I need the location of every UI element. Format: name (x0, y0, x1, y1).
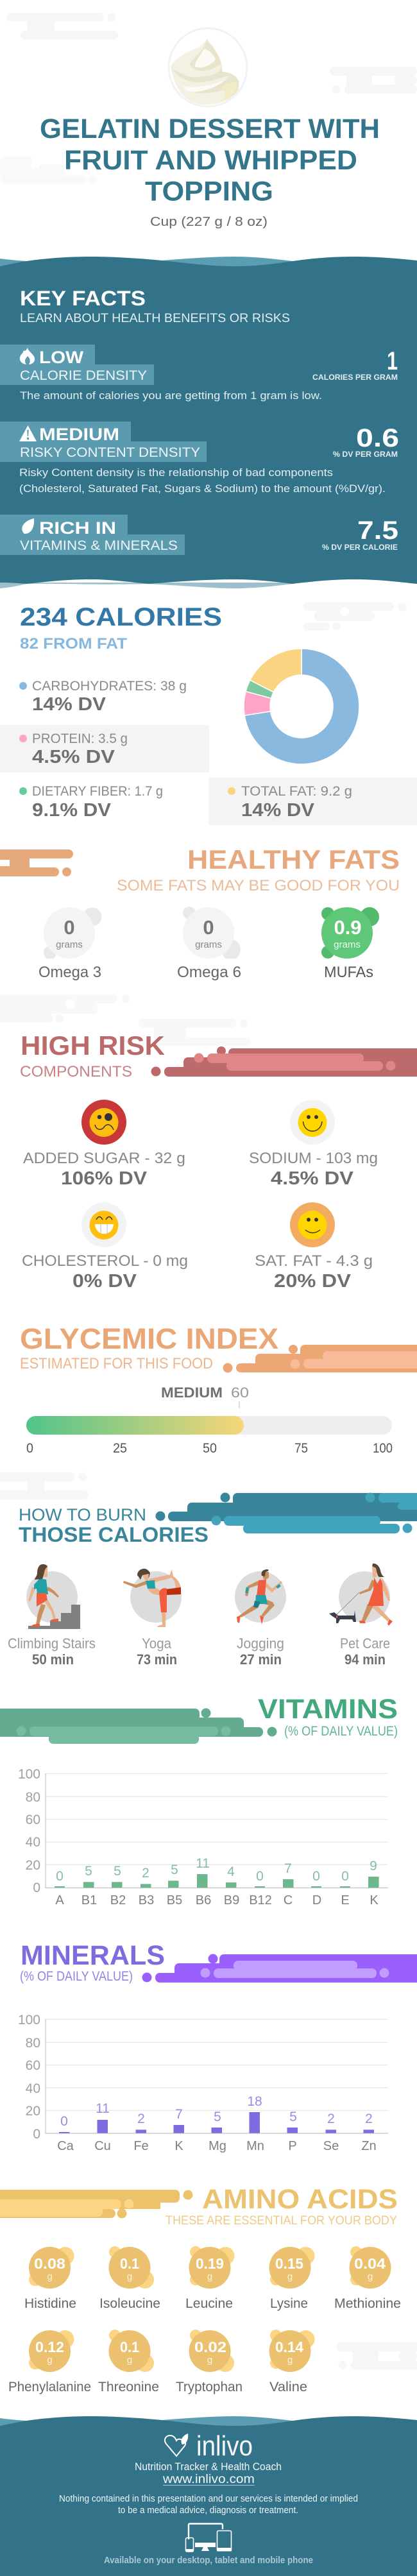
amino acid: phenylalanine: 0.12 (35, 2339, 64, 2355)
bar chart: vitamins: A (55, 1893, 64, 1907)
bar chart: minerals: 5 (214, 2110, 221, 2124)
serving size: Cup (227 g / 8 oz) (150, 215, 268, 229)
stat: MUFAs: MUFAs (324, 964, 373, 981)
bar chart: vitamins: 7 (284, 1861, 292, 1876)
bar chart: vitamins: B5 (167, 1893, 182, 1907)
amino acid: threonine: 0.1 (120, 2339, 139, 2355)
glycemic index gauge: 0 (26, 1441, 33, 1456)
fact: medium risky content density: % DV PER GRAM (333, 451, 398, 459)
glycemic index gauge: 50 (203, 1441, 217, 1456)
glycemic index heading: ESTIMATED FOR THIS FOOD (20, 1355, 213, 1372)
fact: medium risky content density: RISKY CONTENT DENSITY (20, 445, 200, 460)
bar chart: vitamins: 5 (171, 1863, 178, 1877)
amino acid: threonine (98, 2330, 159, 2394)
bar chart: minerals: K (174, 2139, 183, 2153)
bar chart: minerals: 100 (18, 2013, 40, 2027)
bar chart: minerals: Zn (361, 2139, 377, 2153)
bar chart: vitamins: 60 (26, 1813, 40, 1827)
high risk ribbon (151, 1046, 417, 1077)
legend: carbohydrates: 14% DV (32, 694, 106, 715)
high risk heading: HIGH RISK (21, 1030, 165, 1061)
website link: www.inlivo.com (162, 2473, 255, 2486)
vitamins ribbon (0, 1708, 277, 1744)
bar chart: minerals: Cu (94, 2139, 111, 2153)
bar chart: vitamins: 0 (312, 1869, 320, 1884)
bar chart: vitamins: 2 (142, 1866, 149, 1881)
fact: rich in vitamins and minerals: RICH IN (39, 518, 116, 538)
bar chart: vitamins: B9 (224, 1893, 239, 1907)
bar chart: vitamins: 4 (227, 1864, 235, 1879)
glycemic index ribbon (223, 1345, 417, 1373)
background cloud: amino acids (336, 2342, 417, 2369)
title: GELATIN DESSERT WITH (40, 114, 380, 144)
key facts heading (20, 287, 290, 325)
amino acid: valine (269, 2330, 314, 2394)
background clouds: high risk (0, 994, 250, 1046)
vitamins heading: (% OF DAILY VALUE) (284, 1724, 398, 1739)
legend: dietary fiber: 9.1% DV (32, 800, 112, 821)
bar chart: minerals: 0 (60, 2114, 68, 2129)
bar chart: vitamins: B1 (81, 1893, 97, 1907)
healthy fats heading: SOME FATS MAY BE GOOD FOR YOU (117, 877, 400, 894)
healthy fats heading (117, 844, 400, 894)
panel: key facts (0, 257, 417, 588)
burn calories heading (19, 1505, 208, 1546)
fact: low calorie density: 1 (387, 347, 398, 375)
stat: omega 6: Omega 6 (177, 964, 241, 981)
bar chart: vitamins: 5 (114, 1864, 121, 1879)
disclaimer: to be a medical advice, diagnosis or treatment. (118, 2505, 298, 2516)
bar chart: vitamins: K (370, 1893, 379, 1907)
activity: pet care (329, 1564, 393, 1668)
bar chart: vitamins: D (312, 1893, 321, 1907)
bar chart: vitamins: C (284, 1893, 293, 1907)
panel: footer (0, 2416, 417, 2576)
activity: pet care: Pet Care (340, 1635, 390, 1651)
bar chart: minerals: 18 (247, 2094, 262, 2109)
stat: omega 6 (177, 907, 241, 981)
legend: total fat: 14% DV (241, 800, 315, 821)
component: sodium: 4.5% DV (271, 1168, 354, 1189)
fact: low calorie density: LOW (39, 348, 84, 367)
component: added sugar: 106% DV (61, 1168, 148, 1189)
amino acid: leucine: 0.19 (196, 2255, 224, 2272)
vitamins heading: VITAMINS (258, 1694, 398, 1725)
activity: yoga: 73 min (137, 1651, 177, 1668)
legend: protein: 4.5% DV (32, 747, 115, 767)
amino acid: methionine: Methionine (334, 2296, 401, 2311)
bar chart: vitamins: 20 (26, 1858, 40, 1873)
amino acid: histidine (24, 2247, 76, 2311)
bar chart: vitamins: 40 (26, 1835, 40, 1850)
activity: yoga (123, 1569, 182, 1668)
amino acid: methionine: 0.04 (354, 2255, 386, 2272)
fact: rich in vitamins and minerals (0, 515, 398, 555)
component: added sugar (23, 1100, 185, 1189)
bar chart: minerals: Mg (208, 2139, 226, 2153)
logo: inlivo (165, 2430, 253, 2462)
background cloud: calories (303, 602, 407, 631)
amino acid: leucine: Leucine (185, 2296, 233, 2311)
activity: jogging: Jogging (237, 1635, 284, 1651)
title: TOPPING (145, 176, 273, 207)
amino acid: isoleucine: Isoleucine (99, 2296, 160, 2311)
fact: medium risky content density: 0.6 (356, 424, 399, 452)
calories heading: 234 CALORIES (20, 603, 222, 631)
macro rows background (0, 725, 417, 825)
bar chart: vitamins: 5 (85, 1864, 92, 1879)
bar chart: vitamins: B12 (249, 1893, 272, 1907)
component: sodium: SODIUM - 103 mg (249, 1150, 378, 1167)
legend: dietary fiber (19, 784, 163, 821)
high risk heading: COMPONENTS (20, 1063, 132, 1080)
bar chart: vitamins: B6 (196, 1893, 211, 1907)
amino acid: tryptophan (176, 2330, 243, 2394)
amino acid: threonine: Threonine (98, 2380, 159, 2394)
bar chart: minerals (18, 2013, 388, 2153)
amino acid: tryptophan: Tryptophan (176, 2380, 243, 2394)
minerals heading: MINERALS (21, 1940, 165, 1971)
component: cholesterol: CHOLESTEROL - 0 mg (22, 1252, 188, 1270)
component: sodium (249, 1100, 378, 1189)
amino acid: tryptophan: 0.02 (194, 2339, 226, 2355)
glycemic index gauge (26, 1385, 393, 1456)
bar chart: vitamins: 0 (56, 1869, 64, 1884)
fact: medium risky content density: Risky Content density is the relationship of bad components (19, 467, 333, 479)
fact: medium risky content density: (Cholesterol, Saturated Fat, Sugars & Sodium) to the amount (%DV/gr). (19, 483, 386, 495)
amino acid: methionine (334, 2246, 401, 2311)
bar chart: minerals: 5 (289, 2110, 297, 2124)
stat: omega 3: Omega 3 (38, 964, 101, 981)
bar chart: minerals: 60 (26, 2058, 40, 2073)
fact: low calorie density: CALORIES PER GRAM (312, 374, 398, 382)
amino acid: valine: 0.14 (275, 2339, 303, 2355)
stat: MUFAs: grams (334, 939, 361, 950)
bar chart: vitamins: B2 (110, 1893, 126, 1907)
fact: low calorie density (0, 345, 398, 402)
bar chart: minerals: 2 (365, 2111, 373, 2126)
amino acid: phenylalanine (8, 2330, 91, 2394)
glycemic index gauge: 75 (294, 1441, 308, 1456)
amino acid: leucine (185, 2246, 235, 2311)
stat: omega 6: grams (195, 939, 222, 950)
legend: protein (19, 731, 128, 767)
bar chart: minerals: 2 (327, 2111, 335, 2126)
amino acid: phenylalanine: g (47, 2355, 53, 2366)
bar chart: minerals: 7 (175, 2107, 183, 2122)
bar chart: minerals: 20 (26, 2104, 40, 2119)
activity: jogging (235, 1569, 286, 1668)
fact: rich in vitamins and minerals: VITAMINS & MINERALS (20, 538, 178, 553)
legend: carbohydrates (19, 679, 187, 715)
activity: climbing stairs: 50 min (32, 1651, 74, 1668)
legend: protein: PROTEIN: 3.5 g (32, 731, 128, 746)
icon: devices (185, 2524, 232, 2552)
glycemic index heading (20, 1322, 278, 1372)
legend: dietary fiber: DIETARY FIBER: 1.7 g (32, 784, 163, 799)
amino acids heading (166, 2184, 398, 2228)
component: saturated fat: 20% DV (274, 1271, 352, 1292)
disclaimer (59, 2493, 358, 2516)
stat: omega 3: 0 (64, 916, 75, 939)
healthy fats ribbon (0, 849, 73, 876)
logo: inlivo: inlivo (196, 2430, 253, 2462)
bar chart: minerals: 0 (33, 2127, 40, 2142)
amino acid: leucine: g (207, 2271, 212, 2282)
component: added sugar: ADDED SUGAR - 32 g (23, 1150, 185, 1167)
bar chart: vitamins (18, 1767, 388, 1907)
burn calories ribbon (155, 1492, 417, 1533)
bar chart: vitamins: E (341, 1893, 350, 1907)
calories heading: 82 FROM FAT (20, 635, 127, 653)
activity: climbing stairs: Climbing Stairs (8, 1635, 96, 1651)
bar chart: minerals: 11 (96, 2101, 110, 2116)
high risk heading (20, 1030, 165, 1080)
bar chart: vitamins: 100 (18, 1767, 40, 1782)
glycemic index gauge: 25 (113, 1441, 127, 1456)
amino acid: isoleucine: g (127, 2271, 132, 2282)
title: FRUIT AND WHIPPED (64, 145, 357, 176)
burn calories heading: HOW TO BURN (19, 1505, 146, 1524)
food image: whipped topping (169, 28, 247, 107)
tagline: Nutrition Tracker & Health Coach (135, 2461, 282, 2473)
component: cholesterol (22, 1202, 188, 1292)
amino acid: histidine: g (47, 2271, 53, 2282)
burn calories heading: THOSE CALORIES (19, 1523, 208, 1546)
component: saturated fat: SAT. FAT - 4.3 g (255, 1252, 373, 1270)
donut chart: macronutrients (244, 649, 359, 764)
bar chart: minerals: 80 (26, 2036, 40, 2051)
amino acid: lysine: g (287, 2271, 293, 2282)
glycemic index heading: GLYCEMIC INDEX (20, 1322, 278, 1355)
stat: omega 3: grams (56, 939, 83, 950)
bar chart: minerals: 40 (26, 2081, 40, 2096)
legend: total fat: TOTAL FAT: 9.2 g (241, 784, 352, 799)
activity: jogging: 27 min (240, 1651, 282, 1668)
amino acid: valine: Valine (269, 2380, 307, 2394)
footer availability note: Available on your desktop, tablet and mobile phone (104, 2555, 313, 2566)
stat: omega 6: 0 (203, 916, 214, 939)
bar chart: vitamins: 0 (256, 1869, 264, 1884)
activity: pet care: 94 min (345, 1651, 386, 1668)
fact: rich in vitamins and minerals: % DV PER CALORIE (322, 544, 398, 552)
calories heading (20, 603, 222, 653)
amino acid: methionine: g (368, 2271, 373, 2282)
amino acid: valine: g (287, 2355, 293, 2366)
fact: low calorie density: The amount of calories you are getting from 1 gram is low. (20, 390, 322, 402)
stat: omega 3 (38, 907, 101, 981)
title (40, 114, 380, 207)
component: saturated fat (255, 1202, 373, 1292)
fact: medium risky content density (0, 422, 399, 495)
glycemic index gauge: 100 (373, 1441, 393, 1456)
amino acid: lysine: Lysine (270, 2296, 308, 2311)
bar chart: vitamins: 11 (196, 1856, 210, 1871)
bar chart: vitamins: 80 (26, 1790, 40, 1805)
disclaimer: Nothing contained in this presentation and our services is intended or implied (59, 2493, 358, 2504)
component: cholesterol: 0% DV (72, 1271, 137, 1292)
activity: climbing stairs (8, 1564, 96, 1668)
amino acid: tryptophan: g (207, 2355, 212, 2366)
amino acid: lysine: 0.15 (275, 2255, 303, 2272)
amino acid: histidine: Histidine (24, 2296, 76, 2311)
fact: rich in vitamins and minerals: 7.5 (357, 516, 398, 545)
healthy fats heading: HEALTHY FATS (187, 844, 400, 874)
amino acid: isoleucine: 0.1 (120, 2255, 139, 2272)
amino acid: phenylalanine: Phenylalanine (8, 2380, 91, 2394)
bar chart: minerals: Ca (57, 2139, 74, 2153)
fact: low calorie density: CALORIE DENSITY (20, 368, 147, 383)
stat: MUFAs: 0.9 (334, 916, 362, 939)
bar chart: minerals: 2 (137, 2111, 145, 2126)
bar chart: minerals: Fe (133, 2139, 149, 2153)
background clouds: header (0, 13, 417, 184)
amino acid: histidine: 0.08 (34, 2255, 65, 2272)
key facts heading: KEY FACTS (20, 287, 146, 310)
fact: medium risky content density: MEDIUM (39, 425, 119, 444)
bar chart: vitamins: 0 (33, 1881, 40, 1895)
amino acids heading: AMINO ACIDS (202, 2184, 398, 2215)
background cloud: burn calories (0, 1472, 89, 1499)
bar chart: minerals: Mn (246, 2139, 264, 2153)
legend: total fat (228, 784, 352, 821)
amino acids ribbon (0, 2190, 192, 2219)
bar chart: vitamins: B3 (139, 1893, 154, 1907)
amino acid: threonine: g (127, 2355, 132, 2366)
vitamins heading (258, 1694, 398, 1739)
bar chart: minerals: Se (323, 2139, 339, 2153)
amino acids heading: THESE ARE ESSENTIAL FOR YOUR BODY (166, 2214, 397, 2228)
glycemic index gauge: 60 (231, 1385, 249, 1401)
glycemic index gauge: MEDIUM (161, 1385, 223, 1401)
minerals heading: (% OF DAILY VALUE) (20, 1969, 133, 1984)
bar chart: minerals: P (288, 2139, 297, 2153)
activity: yoga: Yoga (142, 1635, 172, 1651)
minerals ribbon (142, 1954, 417, 1983)
key facts heading: LEARN ABOUT HEALTH BENEFITS OR RISKS (20, 312, 290, 325)
bar chart: vitamins: 0 (341, 1869, 349, 1884)
legend: carbohydrates: CARBOHYDRATES: 38 g (32, 679, 187, 694)
amino acid: lysine (269, 2247, 314, 2311)
amino acid: isoleucine (99, 2246, 160, 2311)
stat: MUFAs (321, 907, 379, 981)
bar chart: vitamins: 9 (370, 1859, 377, 1873)
